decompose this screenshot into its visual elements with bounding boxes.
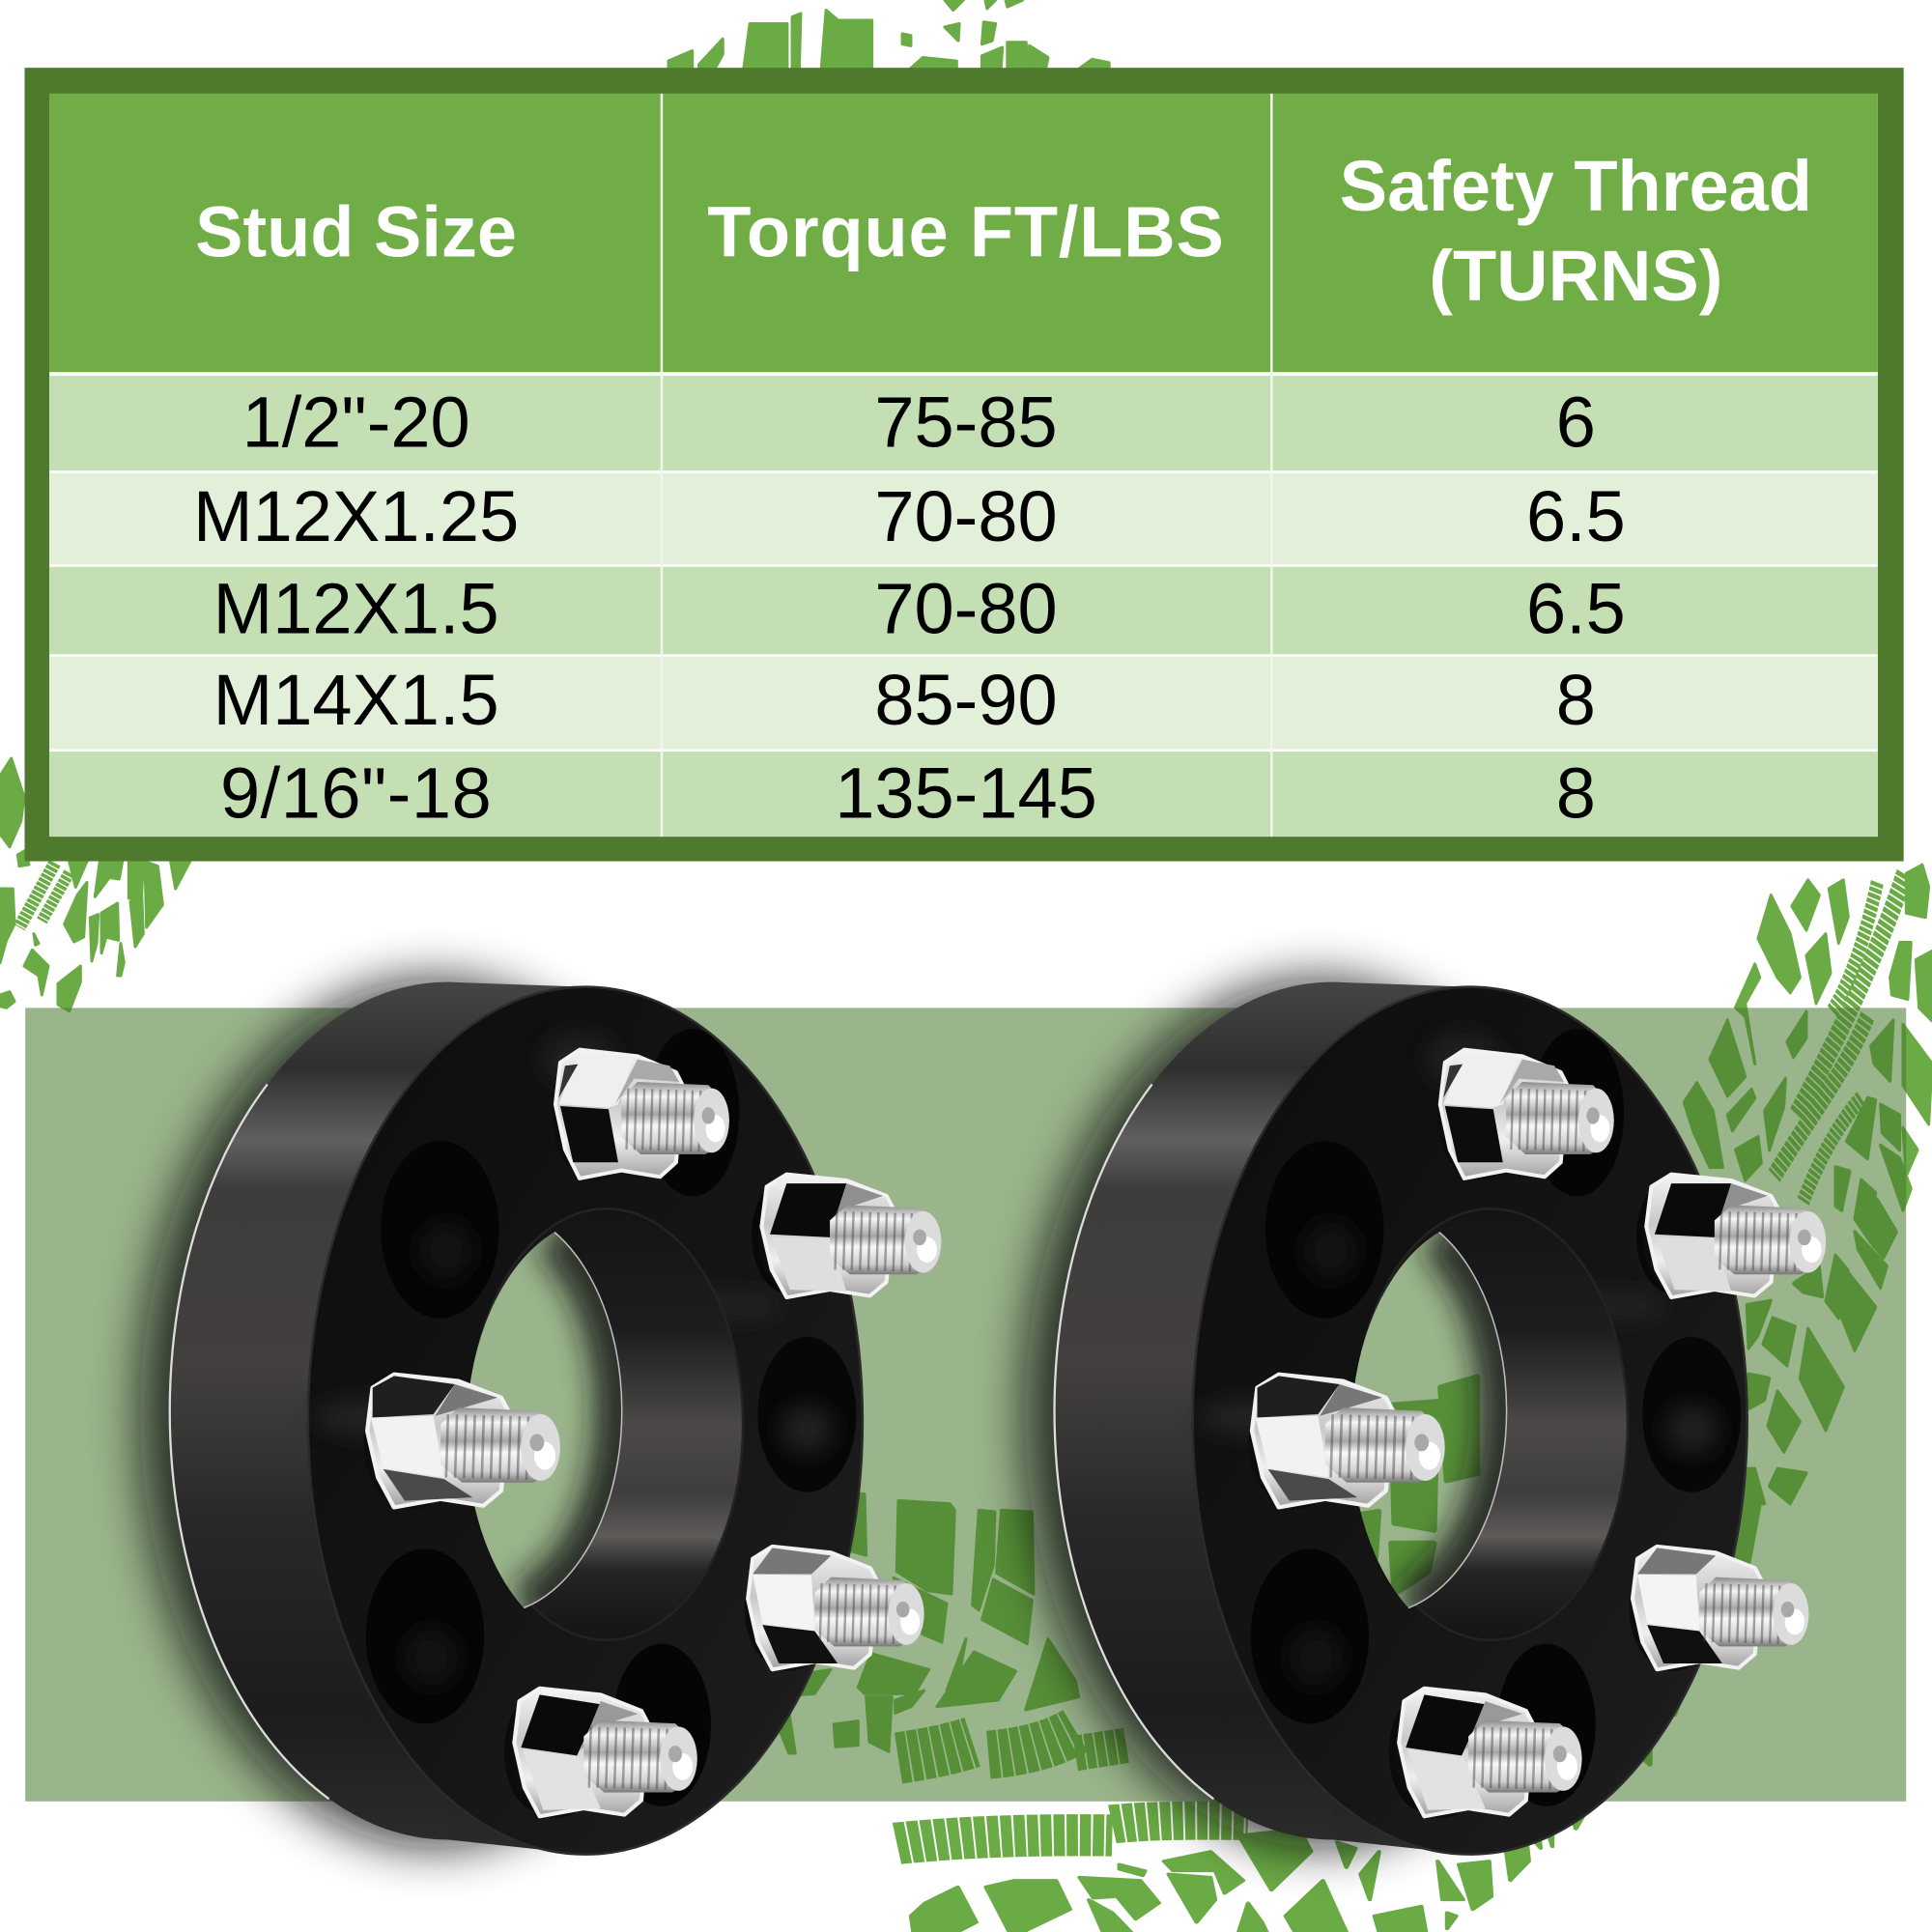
column heading: safety thread: Safety Thread [1340,146,1812,226]
column: stud size values: 1/2"-20 [242,382,470,462]
tread: left edge [0,758,190,1011]
table header band [49,94,1878,372]
tread: top edge [668,0,1109,72]
tread: seen through the second spacer bore [1357,1378,1761,1827]
column: safety thread values: 6 [1556,382,1596,462]
column: torque values [835,382,1097,833]
face light streaks [314,1033,782,1435]
column: safety thread values: 6.5 [1526,569,1626,649]
stud: centre left [363,1375,560,1509]
column: torque values: 70-80 [874,569,1058,649]
stud: upper right [752,1175,941,1299]
wheel spacer: left [140,980,941,1855]
column: safety thread values: 6.5 [1526,476,1626,556]
tread: right band [1684,866,1932,1503]
column heading: safety thread: (TURNS) [1429,236,1722,316]
column: torque values: 135-145 [835,753,1097,833]
column: stud size values [193,382,519,833]
column heading: stud size: Stud Size [195,191,517,271]
panel: green backdrop behind the spacers [25,1008,1906,1802]
tread: centre between the spacers [773,1492,1127,1758]
column heading: torque: Torque FT/LBS [707,191,1225,271]
column: stud size values: 9/16"-18 [220,753,492,833]
table row stripes [49,94,1878,837]
column: stud size values: M12X1.5 [213,569,499,649]
column: torque values: 85-90 [874,660,1058,740]
centre bore wall [469,1208,743,1640]
stud: top [553,1050,729,1180]
column: stud size values: M12X1.25 [193,476,519,556]
spacer front face [308,987,863,1855]
column: torque values: 75-85 [874,382,1058,462]
bore rim highlight [524,1233,622,1608]
stud: bottom [504,1689,697,1818]
column: safety thread values [1526,382,1626,833]
wheel spacer: right [1025,980,1826,1855]
column: safety thread values: 8 [1556,660,1596,740]
spacer body with see-through bore [140,980,863,1855]
bore inner shadow [524,1233,622,1608]
tread: bottom edge [896,1821,1552,1932]
column: torque values: 70-80 [874,476,1058,556]
panel: torque specification table [25,68,1904,862]
column: safety thread values: 8 [1556,753,1596,833]
bolt holes [366,1029,856,1806]
column heading: safety thread [1340,146,1812,316]
stud: lower right [745,1547,924,1671]
column: stud size values: M14X1.5 [213,660,499,740]
